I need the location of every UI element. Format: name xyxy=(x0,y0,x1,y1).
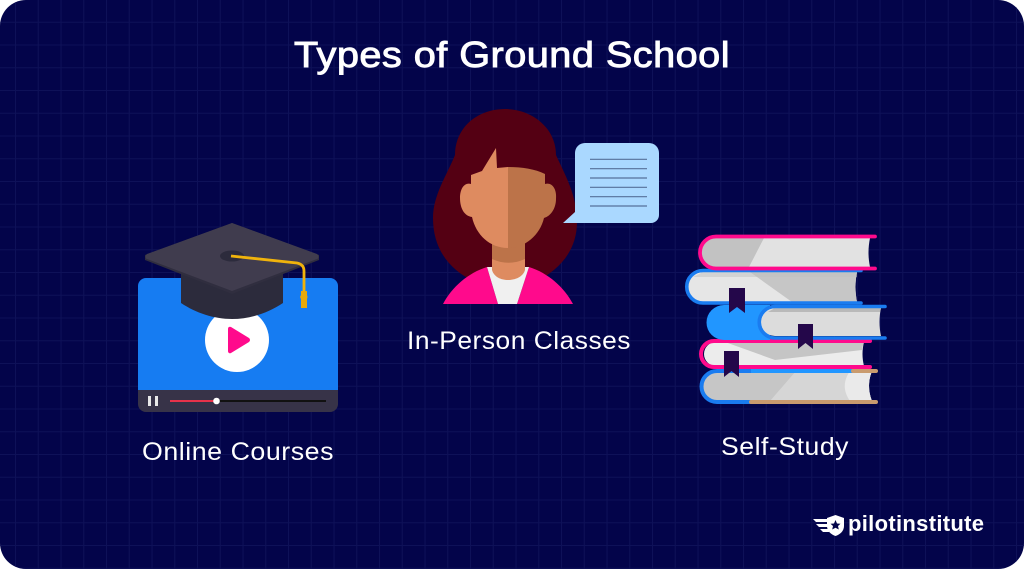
book 4 xyxy=(701,341,870,367)
label: self-study: Self-Study xyxy=(721,433,849,461)
book 3 xyxy=(706,305,885,340)
icon: speech bubble xyxy=(563,143,659,223)
icon: video player xyxy=(138,278,338,412)
logo: pilot institute xyxy=(813,511,984,536)
title: Types of Ground School xyxy=(294,34,730,75)
wordmark: pilotinstitute xyxy=(848,511,984,536)
icon: book stack xyxy=(687,236,885,402)
book 5 xyxy=(702,371,876,402)
book 2 xyxy=(687,270,861,303)
book 1 xyxy=(700,236,875,268)
icon: woman teacher xyxy=(433,109,577,304)
bookmarks xyxy=(724,288,813,377)
label: online courses: Online Courses xyxy=(142,438,334,466)
panel: online courses xyxy=(138,223,338,466)
icon: graduation cap xyxy=(145,223,319,319)
label: in-person classes: In-Person Classes xyxy=(407,327,631,355)
icon: winged shield xyxy=(813,515,844,536)
panel: in-person classes xyxy=(407,109,659,355)
panel: self-study xyxy=(687,236,885,461)
